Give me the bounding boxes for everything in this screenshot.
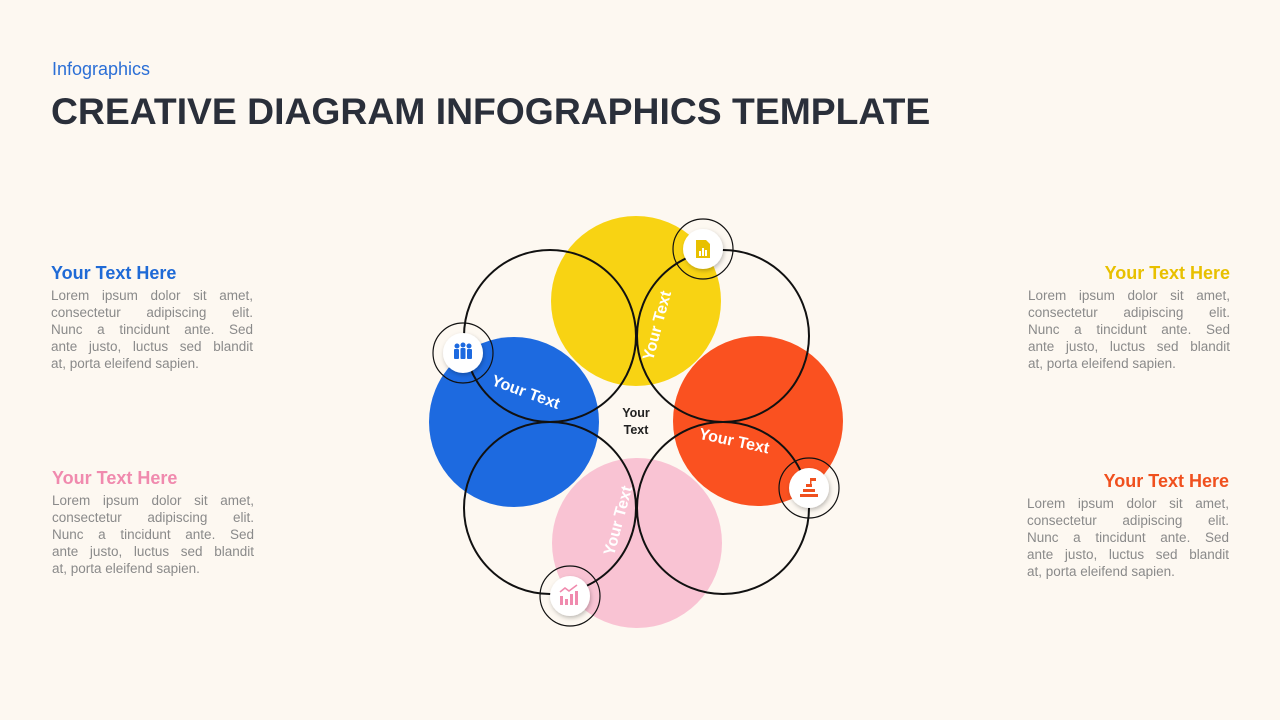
outline circles	[464, 250, 809, 594]
text block: yellow: Lorem ipsum dolor sit amet,	[1028, 288, 1230, 303]
icon: goal pyramid	[779, 458, 839, 518]
circle: blue	[429, 337, 599, 507]
text block: blue: Lorem ipsum dolor sit amet,	[51, 288, 253, 303]
text block: blue: at, porta eleifend sapien.	[51, 356, 199, 371]
text block: yellow: Nunc a tincidunt ante. Sed	[1028, 322, 1230, 337]
text block: yellow: at, porta eleifend sapien.	[1028, 356, 1176, 371]
text block: orange: ante justo, luctus sed blandit	[1027, 547, 1229, 562]
label: orange: Your Text	[697, 426, 771, 457]
text block: blue: Your Text Here	[51, 263, 176, 283]
text block: blue: consectetur adipiscing elit.	[51, 305, 253, 320]
text block: pink: consectetur adipiscing elit.	[52, 510, 254, 525]
label: yellow: Your Text	[640, 288, 675, 363]
circle: pink	[552, 458, 722, 628]
text block: orange	[1027, 471, 1229, 579]
text block: pink: Nunc a tincidunt ante. Sed	[52, 527, 254, 542]
text block: orange: Lorem ipsum dolor sit amet,	[1027, 496, 1229, 511]
circle: yellow	[551, 216, 721, 386]
text block: pink	[52, 468, 254, 576]
text block: orange: at, porta eleifend sapien.	[1027, 564, 1175, 579]
text block: blue: ante justo, luctus sed blandit	[51, 339, 253, 354]
center text: Text	[624, 423, 649, 437]
label: pink: Your Text	[601, 483, 636, 558]
text block: pink: Lorem ipsum dolor sit amet,	[52, 493, 254, 508]
text block: yellow: ante justo, luctus sed blandit	[1028, 339, 1230, 354]
text block: yellow: Your Text Here	[1105, 263, 1230, 283]
icon: growth chart	[540, 566, 600, 626]
label: blue: Your Text	[489, 373, 563, 413]
text block: pink: at, porta eleifend sapien.	[52, 561, 200, 576]
text block: yellow: consectetur adipiscing elit.	[1028, 305, 1230, 320]
text block: blue: Nunc a tincidunt ante. Sed	[51, 322, 253, 337]
text block: orange: Your Text Here	[1104, 471, 1229, 491]
text block: orange: Nunc a tincidunt ante. Sed	[1027, 530, 1229, 545]
subtitle: Infographics	[52, 59, 150, 79]
icon: team	[433, 323, 493, 383]
text block: orange: consectetur adipiscing elit.	[1027, 513, 1229, 528]
center text	[622, 406, 650, 437]
text block: pink: ante justo, luctus sed blandit	[52, 544, 254, 559]
text block: yellow	[1028, 263, 1230, 371]
text block: pink: Your Text Here	[52, 468, 177, 488]
circle: orange	[673, 336, 843, 506]
text block: blue	[51, 263, 253, 371]
title: CREATIVE DIAGRAM INFOGRAPHICS TEMPLATE	[51, 90, 930, 132]
center text: Your	[622, 406, 650, 420]
icon: document chart	[673, 219, 733, 279]
